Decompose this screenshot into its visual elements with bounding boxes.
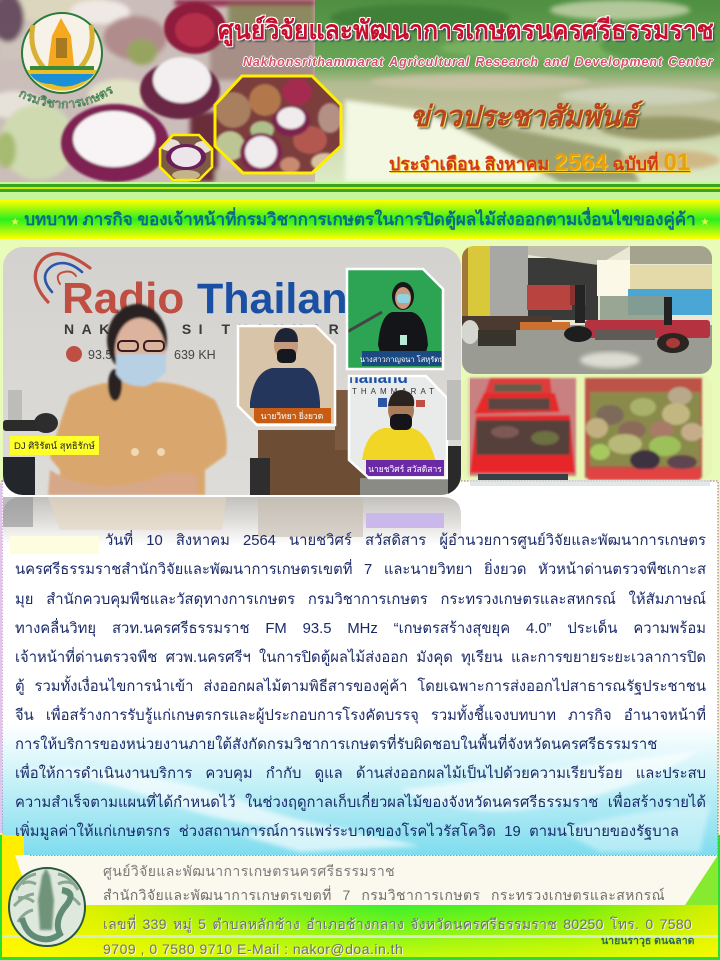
reflection of studio photo (3, 497, 461, 554)
text: 9709 , 0 7580 9710 E-Mail : nakor@doa.in.th (103, 941, 403, 957)
label: Nakhon Si Thammarat: NAKHON SI THAMMARAT (64, 321, 379, 337)
photo: truck and forklift (461, 246, 712, 374)
text: ความสำเร็จตามแผนที่ได้กำหนดไว้ ในช่วงฤดูกาลเก็บเกี่ยวผลไม้ของจังหวัดนครศรีธรรมราช เพื่อสร้างรายได้ (15, 795, 706, 811)
text: มุย สำนักควบคุมพืชและวัสดุทางการเกษตร กรมวิชาการเกษตร กระทรวงเกษตรและสหกรณ์ ให้สัมภาษณ์ (15, 592, 706, 608)
panel: body text background with water (0, 481, 718, 856)
label: Thailand: Thailand (197, 275, 374, 323)
inset: Chawis: นายชวิศร์ สวัสดิสาร (368, 464, 442, 474)
text: การให้บริการของหน่วยงานภายใต้สังกัดกรมวิชาการเกษตรที่รับผิดชอบในพื้นที่จังหวัดนครศรีธรรมราช (15, 737, 657, 753)
chair (258, 430, 368, 495)
label: Radio: Radio (62, 274, 184, 323)
reflection strip under crates (470, 480, 710, 486)
crates left (468, 378, 576, 476)
text: ตู้ รวมทั้งเงื่อนไขการนำเข้า ส่งออกผลไม้ตามพิธีสารของคู่ค้า โดยเฉพาะการส่งออกไปสาธารณรัฐประชาชน (15, 679, 706, 695)
banner background (0, 200, 720, 239)
text: เพื่อให้การดำเนินงานบริการ ควบคุม กำกับ ดูแล ด้านส่งออกผลไม้เป็นไปด้วยความเรียบร้อย และประสบ (15, 766, 706, 782)
author credit: นายนราวุธ ดนฉลาด (601, 935, 694, 947)
newsletter title: ข่าวประชาสัมพันธ์ (410, 101, 637, 133)
text: ทางคลื่นวิทยุ สวท.นครศรีธรรมราช FM 93.5 MHz “เกษตรสร้างสุขยุค 4.0” ประเด็น ความพร้อม (15, 621, 706, 637)
header title: ศูนย์วิจัยและพัฒนาการเกษตรนครศรีธรรมราช (218, 15, 714, 45)
inset: Kanchana: นางสาวกาญจนา โสหุรัตน์ (360, 355, 444, 364)
text: เจ้าหน้าที่ด่านตรวจพืช ศวพ.นครศรีฯ ในการปิดตู้ผลไม้ส่งออก มังคุด ทุเรียน และการขยายระยะเวลาการปิด (15, 650, 706, 666)
photo: crates of mangosteen (460, 375, 712, 480)
inset: Kanchana (347, 269, 444, 370)
banner heading: ★ บทบาท ภารกิจ ของเจ้าหน้าที่กรมวิชาการเกษตรในการปิดตู้ผลไม้ส่งออกตามเงื่อนไขของคู่ค้า ★ (11, 210, 709, 229)
inset: Witthaya (238, 326, 336, 426)
inset: Chawis: THAMMARAT (352, 387, 438, 396)
icon: Department of Agriculture logo (18, 12, 113, 108)
inset: Chawis (348, 374, 448, 480)
inset: Witthaya: นายวิทยา ยิ่งยวด (261, 410, 323, 421)
label: frequencies: 639 KH (174, 348, 216, 362)
icon: small octagon mangosteen inset (160, 135, 212, 180)
inset: Chawis: Thailand (338, 368, 408, 387)
crate right (585, 378, 703, 480)
text: จีน เพื่อสร้างการรับรู้แก่เกษตรกรและผู้ประกอบการโรงคัดบรรจุ รวมทั้งชี้แจงบทบาท ภารกิจ อำนาจหน้าที่ (15, 708, 706, 724)
footer address (103, 863, 692, 957)
panel: mangosteen photo (0, 0, 315, 182)
icon: Naga seal (9, 868, 85, 946)
photo: radio studio interview (3, 247, 461, 495)
text: วันที่ 10 สิงหาคม 2564 นายชวิศร์ สวัสดิสาร ผู้อำนวยการศูนย์วิจัยและพัฒนาการเกษตร (105, 533, 706, 549)
panel: header river background (0, 0, 720, 182)
header subtitle: Nakhonsrithammarat Agricultural Research and Development Center (243, 55, 713, 69)
microphone (3, 390, 58, 433)
label: DJ name (10, 436, 99, 455)
text: นครศรีธรรมราชสำนักวิจัยและพัฒนาการเกษตรเขตที่ 7 และนายวิทยา ยิ่งยวด หัวหน้าด่านตรวจพืชเกาะส (15, 562, 706, 578)
label: frequencies (66, 346, 216, 362)
text: เพิ่มมูลค่าให้แก่เกษตรกร ช่วงสถานการณ์การแพร่ระบาดของโรคไวรัสโควิด 19 ตามนโยบายของรัฐบาล (15, 824, 679, 840)
icon: Department of Agriculture logo: กรมวิชาการเกษตร (18, 86, 113, 108)
person: DJ (48, 304, 227, 495)
body text (15, 530, 706, 840)
text: สำนักวิจัยและพัฒนาการเกษตรเขตที่ 7 กรมวิชาการเกษตร กระทรวงเกษตรและสหกรณ์ (103, 887, 665, 903)
text: ศูนย์วิจัยและพัฒนาการเกษตรนครศรีธรรมราช (103, 863, 395, 879)
label: frequencies: 93.5 (88, 348, 112, 362)
label: DJ name: DJ ศิริรัตน์ สุทธิรักษ์ (14, 440, 95, 452)
divider stripes under header (0, 182, 720, 200)
panel: footer background (0, 832, 720, 960)
issue line: ประจำเดือน สิงหาคม 2564 ฉบับที่ 01 (389, 149, 690, 176)
icon: large octagon mangosteen inset (214, 75, 342, 175)
icon: radio arcs logo (35, 254, 90, 302)
text: เลขที่ 339 หมู่ 5 ตำบลหลักช้าง อำเภอช้างกลาง จังหวัดนครศรีธรรมราช 80250 โทร. 0 7580 (103, 916, 692, 932)
